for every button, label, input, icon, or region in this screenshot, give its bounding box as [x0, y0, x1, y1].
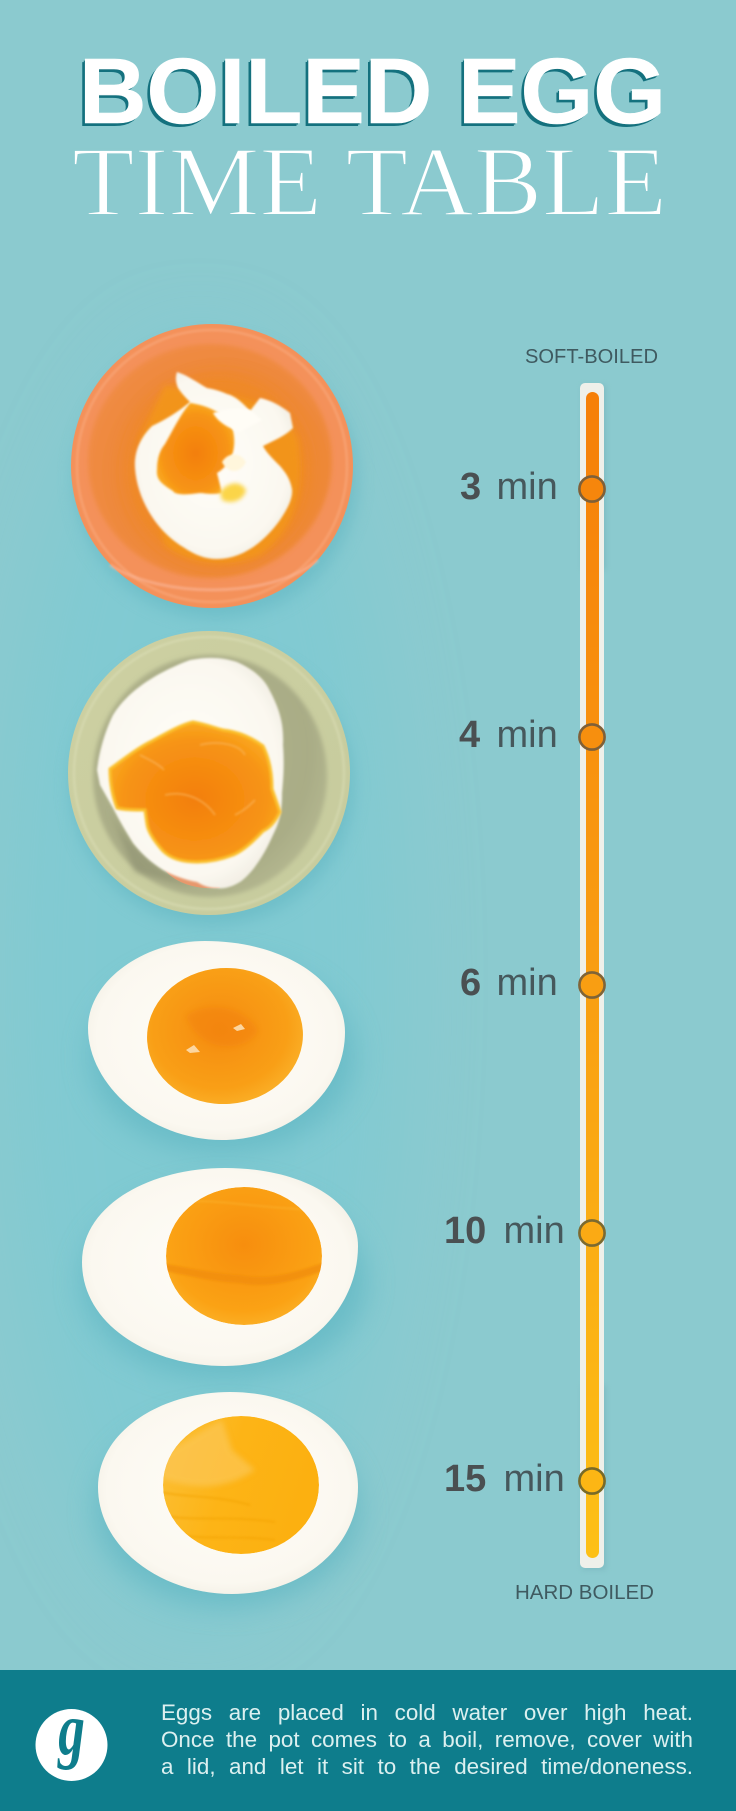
label: soft-boiled: SOFT-BOILED [525, 346, 658, 368]
egg white [98, 1392, 358, 1594]
photo: 10 minute egg [82, 1168, 366, 1378]
heading: boiled egg: BOILED EGG [79, 39, 666, 143]
marker: 10 min: 10 [444, 1210, 486, 1252]
marker: 10 min [444, 1210, 605, 1252]
footer text: Once the pot comes to a boil, remove, cover with [161, 1727, 693, 1752]
photo: 6 minute egg [88, 941, 354, 1152]
logo [36, 1689, 108, 1781]
yolk [142, 963, 308, 1109]
footer band [0, 1670, 736, 1811]
marker: 3 min: min [496, 466, 558, 508]
footer text [161, 1700, 693, 1779]
marker: 4 min [459, 714, 605, 756]
marker: 3 min: 3 [460, 466, 481, 508]
logo: g [57, 1689, 85, 1770]
halved soft egg [97, 658, 284, 888]
label: hard boiled: HARD BOILED [515, 1582, 654, 1604]
marker: 15 min: min [504, 1458, 565, 1500]
photo: orange bowl with 3 minute egg [71, 324, 358, 618]
marker: 15 min: 15 [444, 1458, 486, 1500]
marker: 3 min [460, 466, 605, 508]
marker: 6 min: 6 [460, 962, 481, 1004]
egg white [82, 1168, 358, 1366]
heading: time table: TIME TABLE [72, 126, 667, 237]
marker: 15 min [444, 1458, 605, 1500]
heading: boiled egg: BOILED EGG [76, 42, 663, 146]
footer text: Eggs are placed in cold water over high heat. [161, 1700, 693, 1725]
timeline [444, 346, 658, 1604]
photo: 15 minute egg [96, 1392, 360, 1606]
yolk [160, 1187, 325, 1325]
photo: green bowl with 4 minute egg [68, 631, 354, 925]
title [72, 39, 667, 237]
poached egg [135, 372, 300, 563]
heading: boiled egg: BOILED EGG [78, 40, 664, 144]
marker: 6 min [460, 962, 605, 1004]
marker: 10 min: min [504, 1210, 565, 1252]
green bowl [68, 631, 350, 915]
marker: 6 min: min [496, 962, 558, 1004]
marker: 4 min: 4 [459, 714, 480, 756]
marker: 4 min: min [496, 714, 558, 756]
timeline track [580, 383, 606, 1570]
egg white [88, 941, 345, 1140]
orange bowl [71, 324, 353, 608]
footer text: a lid, and let it sit to the desired time/doneness. [161, 1754, 693, 1779]
yolk [160, 1416, 319, 1554]
